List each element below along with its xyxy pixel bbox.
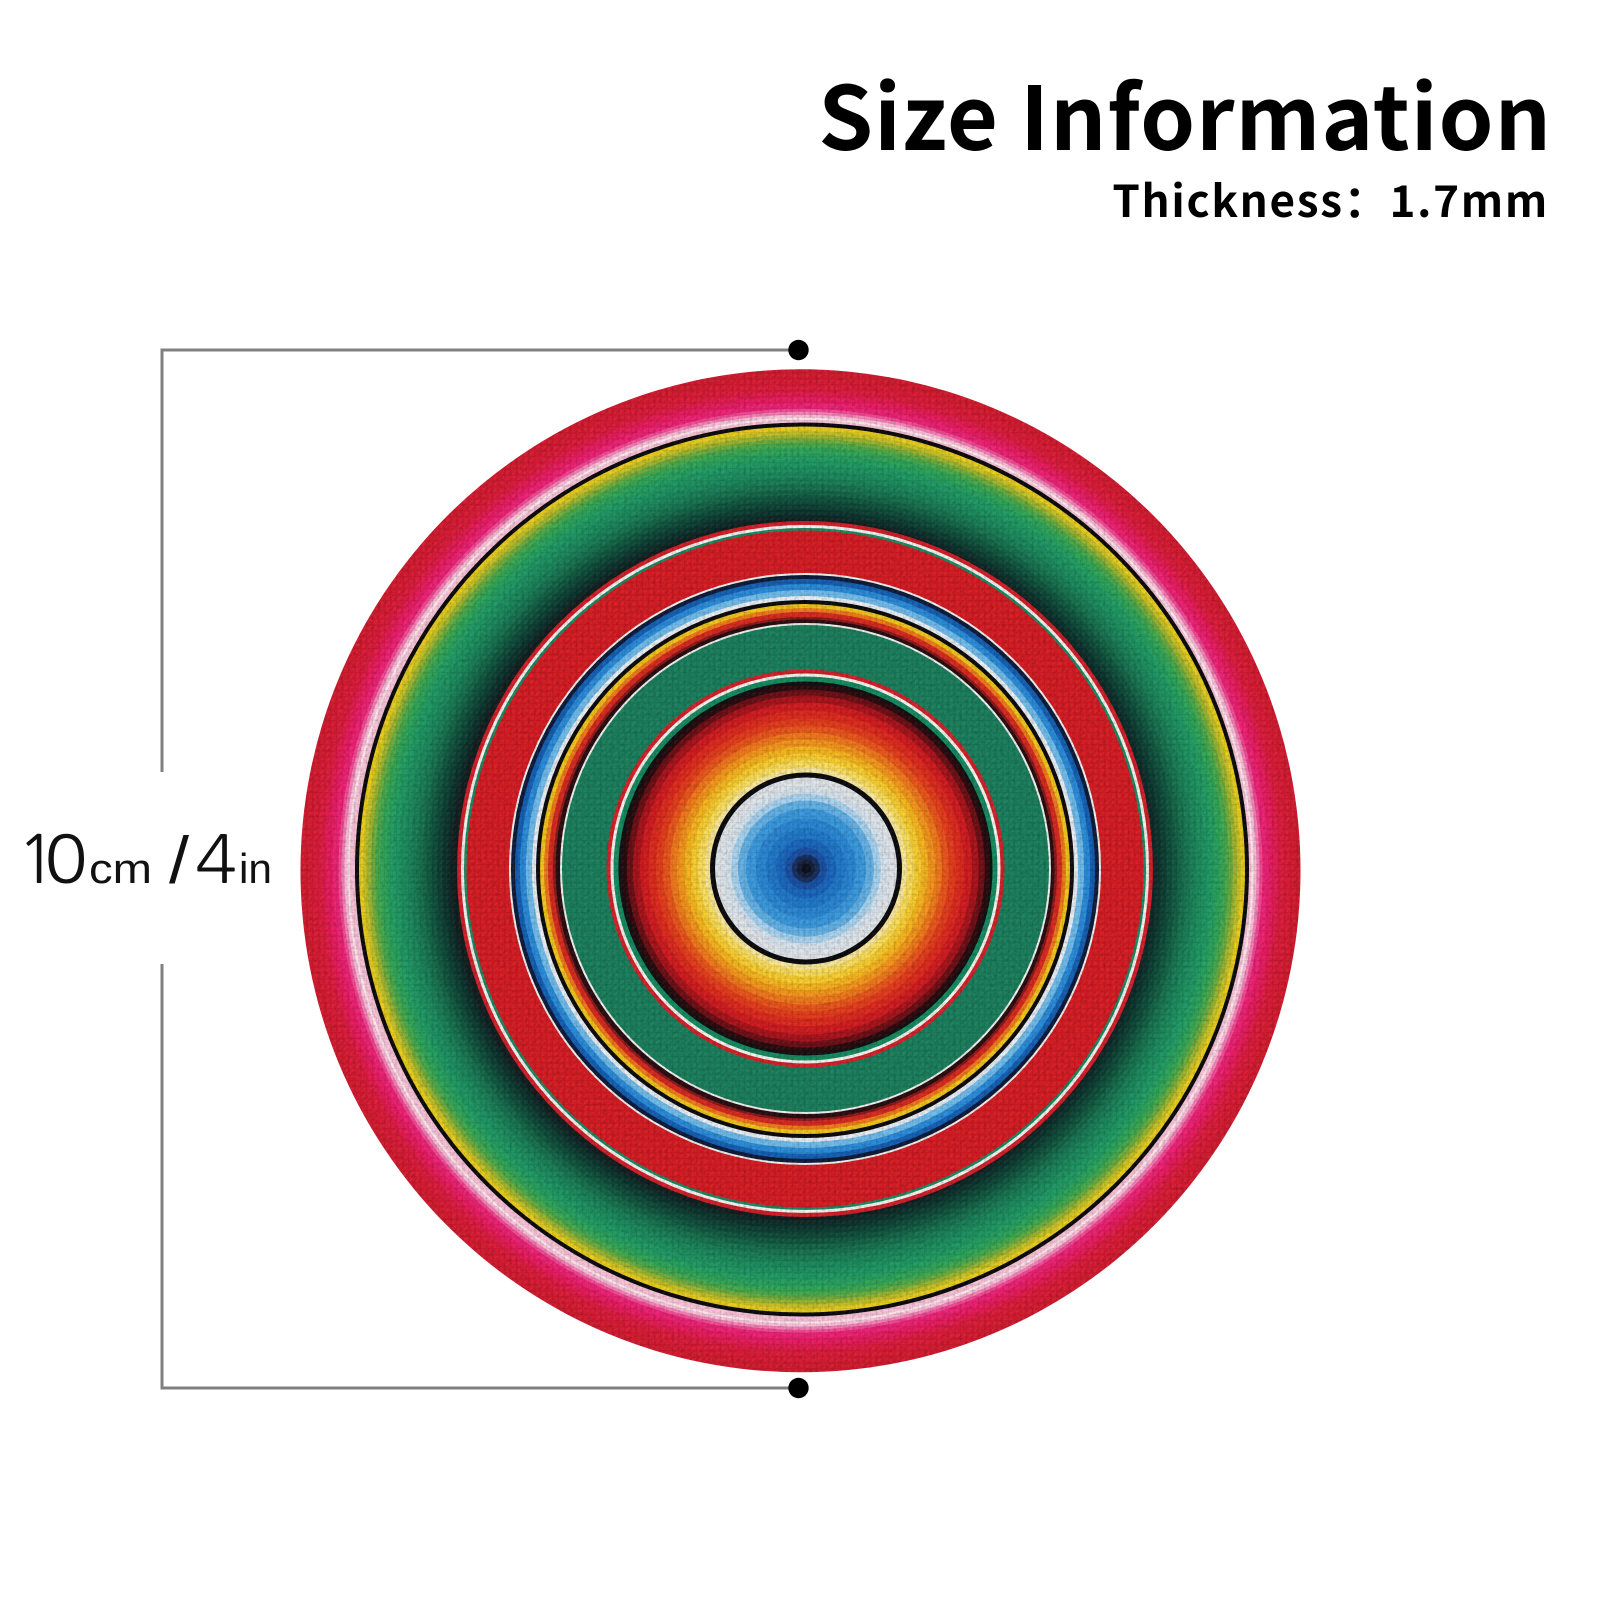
band: outer red and pink (300, 369, 1300, 1372)
diameter label: / (169, 823, 190, 897)
diameter label (17, 823, 272, 897)
title: Size Information (818, 49, 1552, 176)
band: red to yellow sunburst (622, 684, 990, 1052)
band: blue ring (509, 573, 1101, 1165)
dimension bracket (162, 340, 809, 1398)
diameter label: in (239, 845, 272, 892)
band: wide red ring (457, 521, 1153, 1217)
diameter label: 0 (44, 827, 88, 893)
thickness note: Thickness：1.7mm (1112, 166, 1549, 230)
diameter label: 1 (17, 827, 57, 893)
diameter label: 4 (195, 827, 237, 893)
band: green ring (560, 623, 1051, 1114)
diameter label: cm (89, 845, 152, 892)
serape coaster disc (298, 368, 1304, 1374)
woven texture overlay (298, 368, 1304, 1374)
marker: bottom dot (788, 1378, 809, 1398)
marker: top dot (788, 340, 809, 360)
center: blue eye (710, 772, 902, 964)
band: outer green fade (355, 422, 1249, 1316)
